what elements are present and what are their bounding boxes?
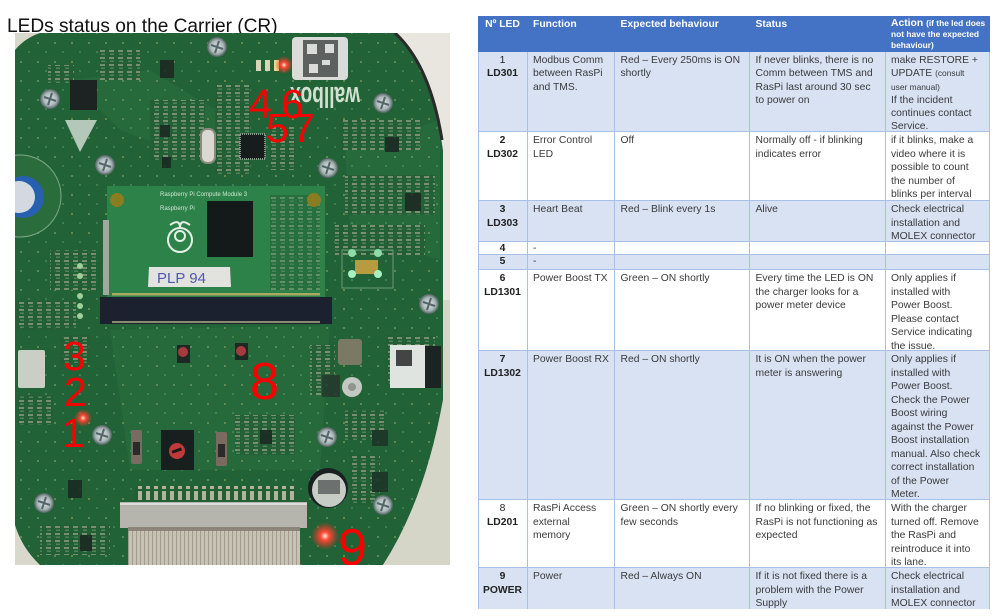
photo: carrier circuit board (15, 33, 450, 565)
row 6: installed with (891, 287, 950, 298)
row 2: if it blinks, make a (891, 135, 973, 146)
red numbers: 8 (250, 353, 279, 411)
row 3: installation and (891, 218, 960, 229)
row 7 (478, 351, 990, 500)
row 3: Alive (756, 204, 778, 215)
row 1: to power on (756, 95, 810, 106)
left white module (18, 350, 45, 388)
row 7: Meter. (891, 489, 920, 500)
ribbon connector (120, 502, 307, 565)
led 1 glow (74, 409, 92, 427)
table: LED status (478, 16, 990, 609)
row 9: installation and (891, 585, 960, 596)
row 6: the charger looks for a (756, 287, 858, 298)
prog pads (342, 249, 393, 288)
row 2: LED (533, 149, 553, 160)
right white module (390, 345, 441, 388)
row 5 (478, 255, 990, 270)
row 7: It is ON when the power (756, 354, 866, 365)
QR label (292, 37, 348, 80)
row 7: Boost wiring (891, 408, 947, 419)
raspberry pi module: Raspberry Pi (160, 206, 195, 212)
row 1: make RESTORE + (891, 55, 978, 66)
row 7: Boost installation (891, 435, 969, 446)
red numbers (62, 81, 367, 577)
photo background (15, 33, 450, 565)
row 9: problem with the Power (756, 585, 864, 596)
row 7: Only applies if (891, 354, 956, 365)
white casing top right (395, 33, 450, 300)
row 6: Power Boost. (891, 300, 953, 311)
row 3 (478, 201, 990, 242)
row 7: of the Power (891, 476, 949, 487)
red numbers: 6 (281, 81, 304, 127)
raspberry logo (168, 222, 192, 252)
row 4: 4 (500, 243, 505, 254)
bottom right casing (383, 300, 450, 565)
left side pins (77, 263, 83, 319)
status LEDs top (256, 56, 293, 74)
row 7: manual. Also check (891, 449, 980, 460)
row 7: meter is answering (756, 368, 842, 379)
row 6: Green – ON shortly (620, 273, 710, 284)
row 6: Power Boost TX (533, 273, 608, 284)
row 4 (478, 242, 990, 255)
table header: Status (756, 19, 787, 30)
rotary selector (161, 430, 194, 470)
row 6: 6 (500, 273, 505, 284)
row 2: Normally off - if blinking (756, 135, 863, 146)
red numbers: 4 (249, 81, 272, 127)
row 9: Red – Always ON (620, 571, 702, 582)
row 9: Check electrical (891, 571, 964, 582)
row 8 (478, 500, 990, 568)
row 5: - (533, 256, 536, 267)
table header: not have the expected (891, 29, 979, 39)
row 2: Error Control (533, 135, 592, 146)
row 8: turned off. Remove (891, 517, 979, 528)
raspberry pi module (107, 186, 325, 297)
row 1: continues contact (891, 108, 972, 119)
row 6: power meter device (756, 300, 846, 311)
row 8: memory (533, 530, 570, 541)
small capacitor (342, 377, 362, 397)
table header: Function (533, 19, 577, 30)
row 2: blinks per interval (891, 189, 972, 200)
table header: Expected behaviour (620, 19, 719, 30)
red numbers: 3 (63, 333, 86, 379)
warning triangle (65, 120, 97, 152)
row 2: indicates error (756, 149, 821, 160)
row 1: Modbus Comm (533, 55, 603, 66)
row 1: If the incident (891, 95, 953, 106)
processor chip (240, 134, 265, 159)
row 3: 3 (500, 204, 505, 215)
row 1: UPDATE (consult (891, 68, 964, 79)
row 6: Only applies if (891, 273, 956, 284)
row 1: and TMS. (533, 82, 578, 92)
raspberry pi module: Raspberry Pi Compute Module 3 (160, 192, 248, 198)
green board (15, 33, 443, 565)
row 7: LD1302 (484, 368, 521, 379)
row 8: the RasPi and (891, 530, 956, 541)
row 2: LD302 (487, 149, 518, 160)
row 3: MOLEX connector (891, 231, 976, 242)
row 2: 2 (500, 135, 505, 146)
title: LEDs status on the Carrier (CR) (7, 16, 278, 37)
red numbers: 7 (292, 105, 315, 151)
row 9 (478, 568, 990, 609)
row 8: With the charger (891, 503, 967, 514)
row 6: Please contact (891, 314, 959, 325)
row 6 (478, 270, 990, 351)
table header (478, 16, 990, 52)
row 2 (478, 132, 990, 201)
row 8: If no blinking or fixed, the (756, 503, 870, 514)
row 6: the issue. (891, 341, 935, 352)
row 9: POWER (483, 585, 522, 596)
row 1: Red – Every 250ms is ON (620, 55, 740, 66)
row 7: Power Boost. (891, 381, 953, 392)
row 8: its lane. (891, 557, 927, 568)
row 1: shortly (620, 68, 651, 79)
memory socket (100, 293, 332, 324)
row 1: between RasPi (533, 68, 603, 79)
row 7: installed with (891, 368, 950, 379)
row 9: MOLEX connector (891, 598, 976, 609)
row 7: correct installation (891, 462, 974, 473)
power led glow (311, 522, 339, 550)
header pins row (135, 486, 295, 500)
handwritten label (148, 267, 231, 287)
row 3: Heart Beat (533, 204, 582, 215)
row 6: Service indicating (891, 327, 972, 338)
inductor (338, 339, 362, 365)
row 9: Power (533, 571, 562, 582)
row 6: LD1301 (484, 287, 521, 298)
table header: Action (if the led does (891, 18, 985, 29)
crystal (201, 129, 215, 163)
large capacitor (308, 468, 348, 508)
red buttons (177, 343, 248, 363)
row 8: LD201 (487, 517, 518, 528)
red numbers: 1 (62, 410, 85, 456)
row 1: Comm between TMS and (756, 68, 873, 79)
row 7: Check the Power (891, 395, 970, 406)
row 8: Green – ON shortly every (620, 503, 738, 514)
row 1: LD301 (487, 68, 518, 79)
row 1: RasPi last around 30 sec (756, 82, 870, 92)
row 9: 9 (500, 571, 505, 582)
switches (131, 430, 227, 466)
row 2: video where it is (891, 149, 965, 160)
board shading traces (70, 70, 440, 470)
raspberry pi module: PLP 94 (157, 270, 206, 287)
row 8: 8 (500, 503, 505, 514)
brand text upside down: wallbox (290, 80, 361, 112)
row 7: Red – ON shortly (620, 354, 700, 365)
table header: Nº LED (485, 19, 520, 30)
row 8: external (533, 517, 570, 528)
blue capacitor (0, 155, 61, 237)
row 4: - (533, 243, 536, 254)
row 8: few seconds (620, 517, 678, 528)
large chip left (70, 80, 97, 110)
small components (16, 50, 435, 555)
row 3: Red – Blink every 1s (620, 204, 715, 215)
row 3: Check electrical (891, 204, 964, 215)
row 2: possible to count (891, 162, 969, 173)
red numbers: 5 (266, 105, 289, 151)
row 9: Supply (756, 598, 787, 609)
row 8: RasPi is not functioning as (756, 517, 877, 528)
row 8: reintroduce it into (891, 544, 970, 555)
row 1: Service. (891, 121, 928, 132)
row 2: the number of (891, 176, 955, 187)
row 2: Off (620, 135, 634, 146)
row 3: LD303 (487, 218, 518, 229)
row 5: 5 (500, 256, 505, 267)
screws (34, 37, 439, 515)
red numbers: 2 (64, 369, 87, 415)
row 9: If it is not fixed there is a (756, 571, 867, 582)
row 1: 1 (500, 55, 505, 66)
row 1: user manual) (891, 82, 940, 92)
row 6: Every time the LED is ON (756, 273, 873, 284)
row 1 (478, 52, 990, 132)
row 8: expected (756, 530, 797, 541)
row 1: If never blinks, there is no (756, 55, 873, 66)
table header: behaviour) (891, 40, 934, 50)
row 7: Power Boost RX (533, 354, 609, 365)
row 7: 7 (500, 354, 505, 365)
module side connector and clips (103, 220, 109, 295)
row 7: against the Power (891, 422, 974, 433)
row 8: RasPi Access (533, 503, 596, 514)
